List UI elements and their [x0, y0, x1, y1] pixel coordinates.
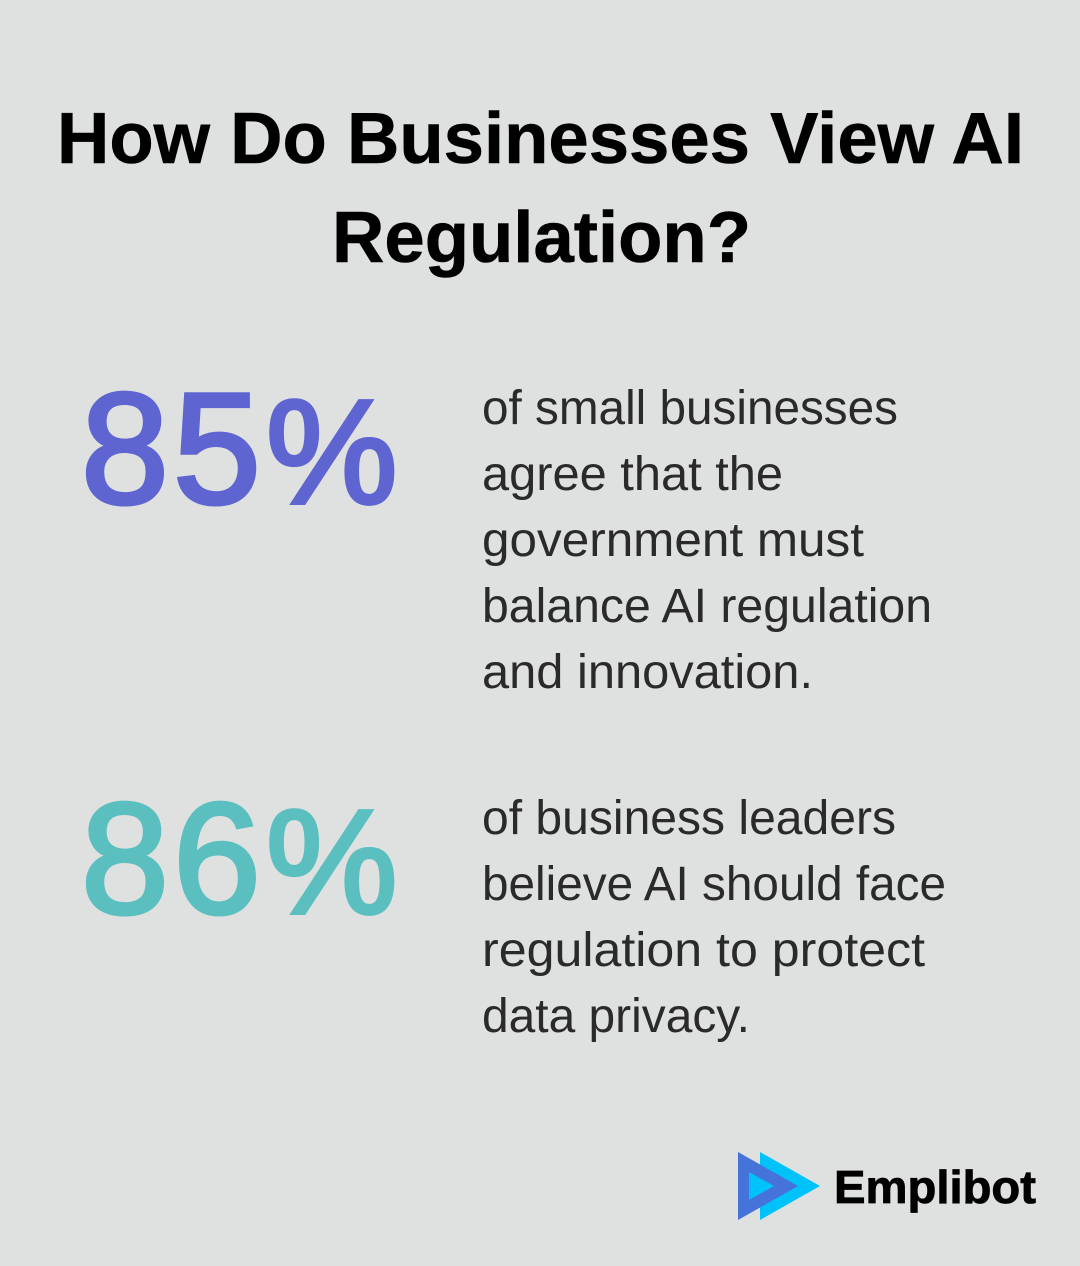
stat: 85 percent: 85% — [81, 361, 398, 537]
text block: small businesses: of small businesses — [482, 382, 898, 435]
text block: small businesses — [482, 382, 932, 699]
title: Regulation? — [332, 198, 751, 278]
title — [57, 99, 1024, 278]
icon: Emplibot logo mark — [738, 1152, 820, 1220]
text block: small businesses: balance AI regulation — [482, 580, 932, 633]
logo wordmark: Emplibot — [834, 1161, 1036, 1213]
text block: business leaders: data privacy. — [482, 990, 750, 1043]
stat: 86 percent: 86% — [81, 771, 398, 947]
text block: business leaders — [482, 792, 946, 1043]
text block: business leaders: of business leaders — [482, 792, 896, 845]
title: How Do Businesses View AI — [57, 99, 1024, 179]
text block: small businesses: government must — [482, 514, 864, 567]
text block: business leaders: believe AI should face — [482, 858, 946, 911]
text block: small businesses: and innovation. — [482, 646, 813, 699]
text block: small businesses: agree that the — [482, 448, 783, 501]
text block: business leaders: regulation to protect — [482, 924, 925, 977]
